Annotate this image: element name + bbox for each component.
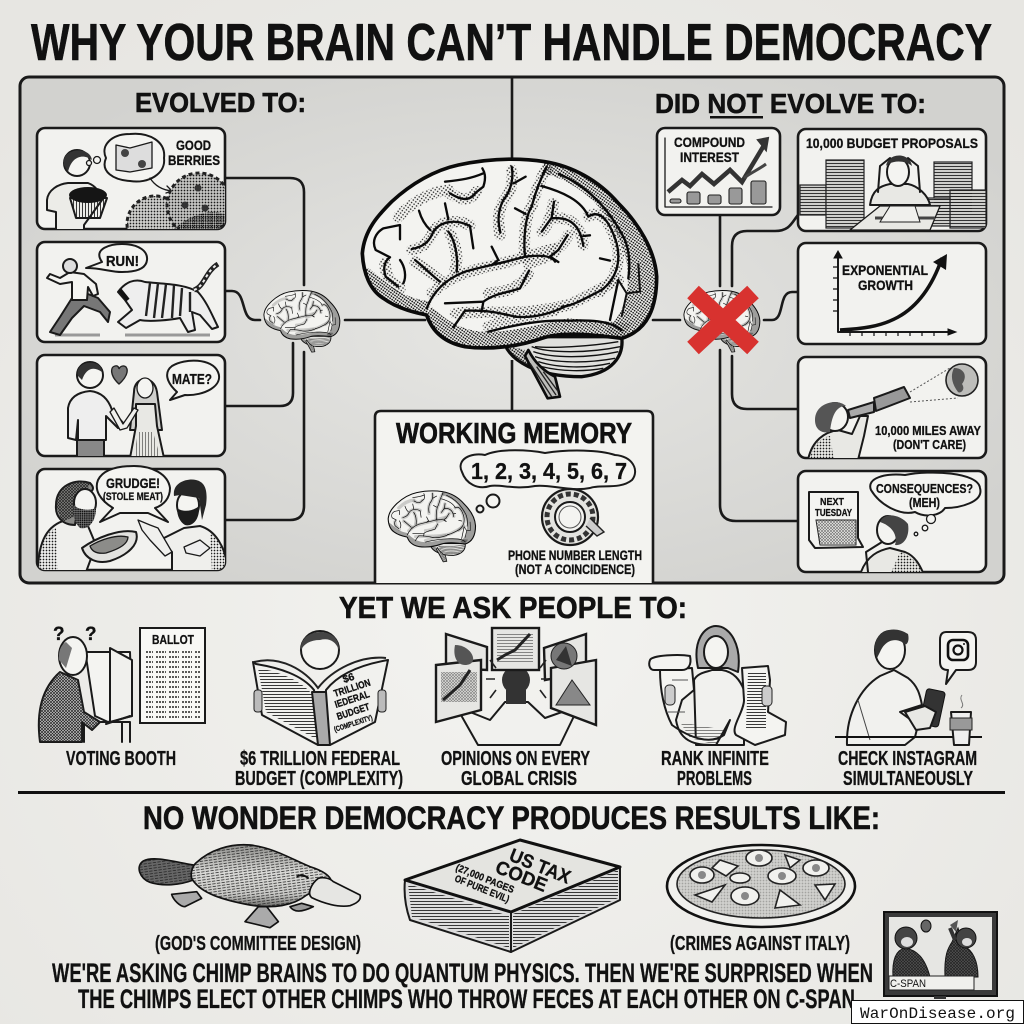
card: compound interest: COMPOUND [674,135,745,150]
caption: rank infinite problems: PROBLEMS [677,768,752,790]
icon: brain [388,491,476,562]
thought cloud with digits [461,450,635,512]
card: good berries: BERRIES [168,153,220,168]
card: mate [37,355,225,458]
icon: person facing global crisis screens [436,628,596,745]
card: telescope, 10,000 miles away: 10,000 MILES AWAY [875,423,981,438]
card: mate: MATE? [172,372,212,388]
heading: evolved to: EVOLVED TO: [135,87,306,118]
caption: rank infinite problems [661,748,769,790]
icon: federal budget book: TRILLION [333,678,372,700]
caption: check instagram simultaneously: SIMULTANEOUSLY [843,768,973,790]
icon: us tax code book: OF PURE EVIL) [453,874,511,906]
icon: large central brain [362,159,657,398]
caption: federal budget [235,748,403,790]
card: 10,000 budget proposals [798,129,986,231]
icon: voting booth: BALLOT [152,632,194,647]
card: next tuesday consequences: NEXT [820,496,844,508]
caption: federal budget: $6 TRILLION FEDERAL [240,748,400,770]
icon: us tax code book: CODE [492,857,550,897]
icon: voting booth: ? [53,624,65,645]
icon: federal budget book: IEDERAL [334,689,371,711]
panel: working memory [375,411,653,583]
card: run from tiger [37,242,225,342]
thought cloud with digits: 1, 2, 3, 4, 5, 6, 7 [471,458,627,484]
closing statement [52,958,873,1014]
caption: federal budget: BUDGET (COMPLEXITY) [235,768,403,790]
card: exponential growth [798,243,986,344]
card: grudge: GRUDGE! [106,475,160,491]
icon: C-SPAN television with chimps [884,912,997,999]
icon: us tax code book [405,840,620,952]
icon: small brain crossed out [684,290,760,352]
card: grudge: (STOLE MEAT) [103,491,163,503]
caption: phone number length: (NOT A COINCIDENCE) [515,562,635,577]
icon: voting booth: ? [85,624,97,645]
caption: god's committee design: (GOD'S COMMITTEE DESIGN) [155,933,361,955]
card: compound interest: INTEREST [680,150,740,165]
card: exponential growth: GROWTH [858,277,913,293]
connectors: right cards to crossed brain [653,215,798,521]
icon: person checking instagram [835,629,982,745]
icon: C-SPAN television with chimps: C-SPAN [890,978,926,990]
heading: yet we ask people to: YET WE ASK PEOPLE TO: [339,590,687,625]
card: 10,000 budget proposals: 10,000 BUDGET PROPOSALS [806,135,978,151]
connectors: left cards to small brain [225,178,425,520]
caption: voting booth: VOTING BOOTH [66,748,176,770]
icon: platypus [139,845,360,928]
card: next tuesday consequences: CONSEQUENCES? [876,481,973,496]
icon: us tax code book: US TAX [506,845,574,889]
icon: federal budget book: $6 [341,671,356,686]
icon: pizza [667,845,855,927]
caption: opinions on every global crisis: OPINIONS ON EVERY [441,748,590,770]
card: grudge [37,466,228,572]
card: good berries: GOOD [176,138,211,153]
card: exponential growth: EXPONENTIAL [842,262,928,278]
icon: us tax code book: (27,000 PAGES [454,863,516,896]
icon: federal budget book [253,631,388,745]
caption: opinions on every global crisis [441,748,590,790]
icon: federal budget book: BUDGET [336,702,371,723]
icon: federal budget book: (COMPLEXITY) [333,713,374,734]
card: telescope, 10,000 miles away [798,357,986,460]
heading: did not evolve to: DID NOT EVOLVE TO: [655,88,926,119]
caption: phone number length [508,548,642,577]
heading: no wonder: NO WONDER DEMOCRACY PRODUCES RESULTS LIKE: [143,800,880,836]
card: next tuesday consequences [798,471,986,575]
panel: brain comparison [20,77,1004,583]
card: next tuesday consequences: (MEH) [909,495,940,510]
caption: rank infinite problems: RANK INFINITE [661,748,769,770]
caption: opinions on every global crisis: GLOBAL CRISIS [461,768,577,790]
icon: voting booth [39,624,205,742]
caption: crimes against italy: (CRIMES AGAINST ITALY) [670,933,850,955]
icon: small brain left [264,290,340,352]
heading: working memory: WORKING MEMORY [396,418,632,450]
watermark: WarOnDisease.org [860,1005,1015,1023]
icon: person with long scroll [649,626,786,745]
icon: rotary phone dial [542,489,604,545]
card: next tuesday consequences: TUESDAY [815,507,852,519]
card: run from tiger: RUN! [106,253,139,270]
caption: check instagram simultaneously [838,748,977,790]
card: good berries [36,126,226,230]
card: compound interest [657,128,780,215]
card: telescope, 10,000 miles away: (DON'T CARE) [893,437,966,452]
caption: phone number length: PHONE NUMBER LENGTH [508,548,642,563]
